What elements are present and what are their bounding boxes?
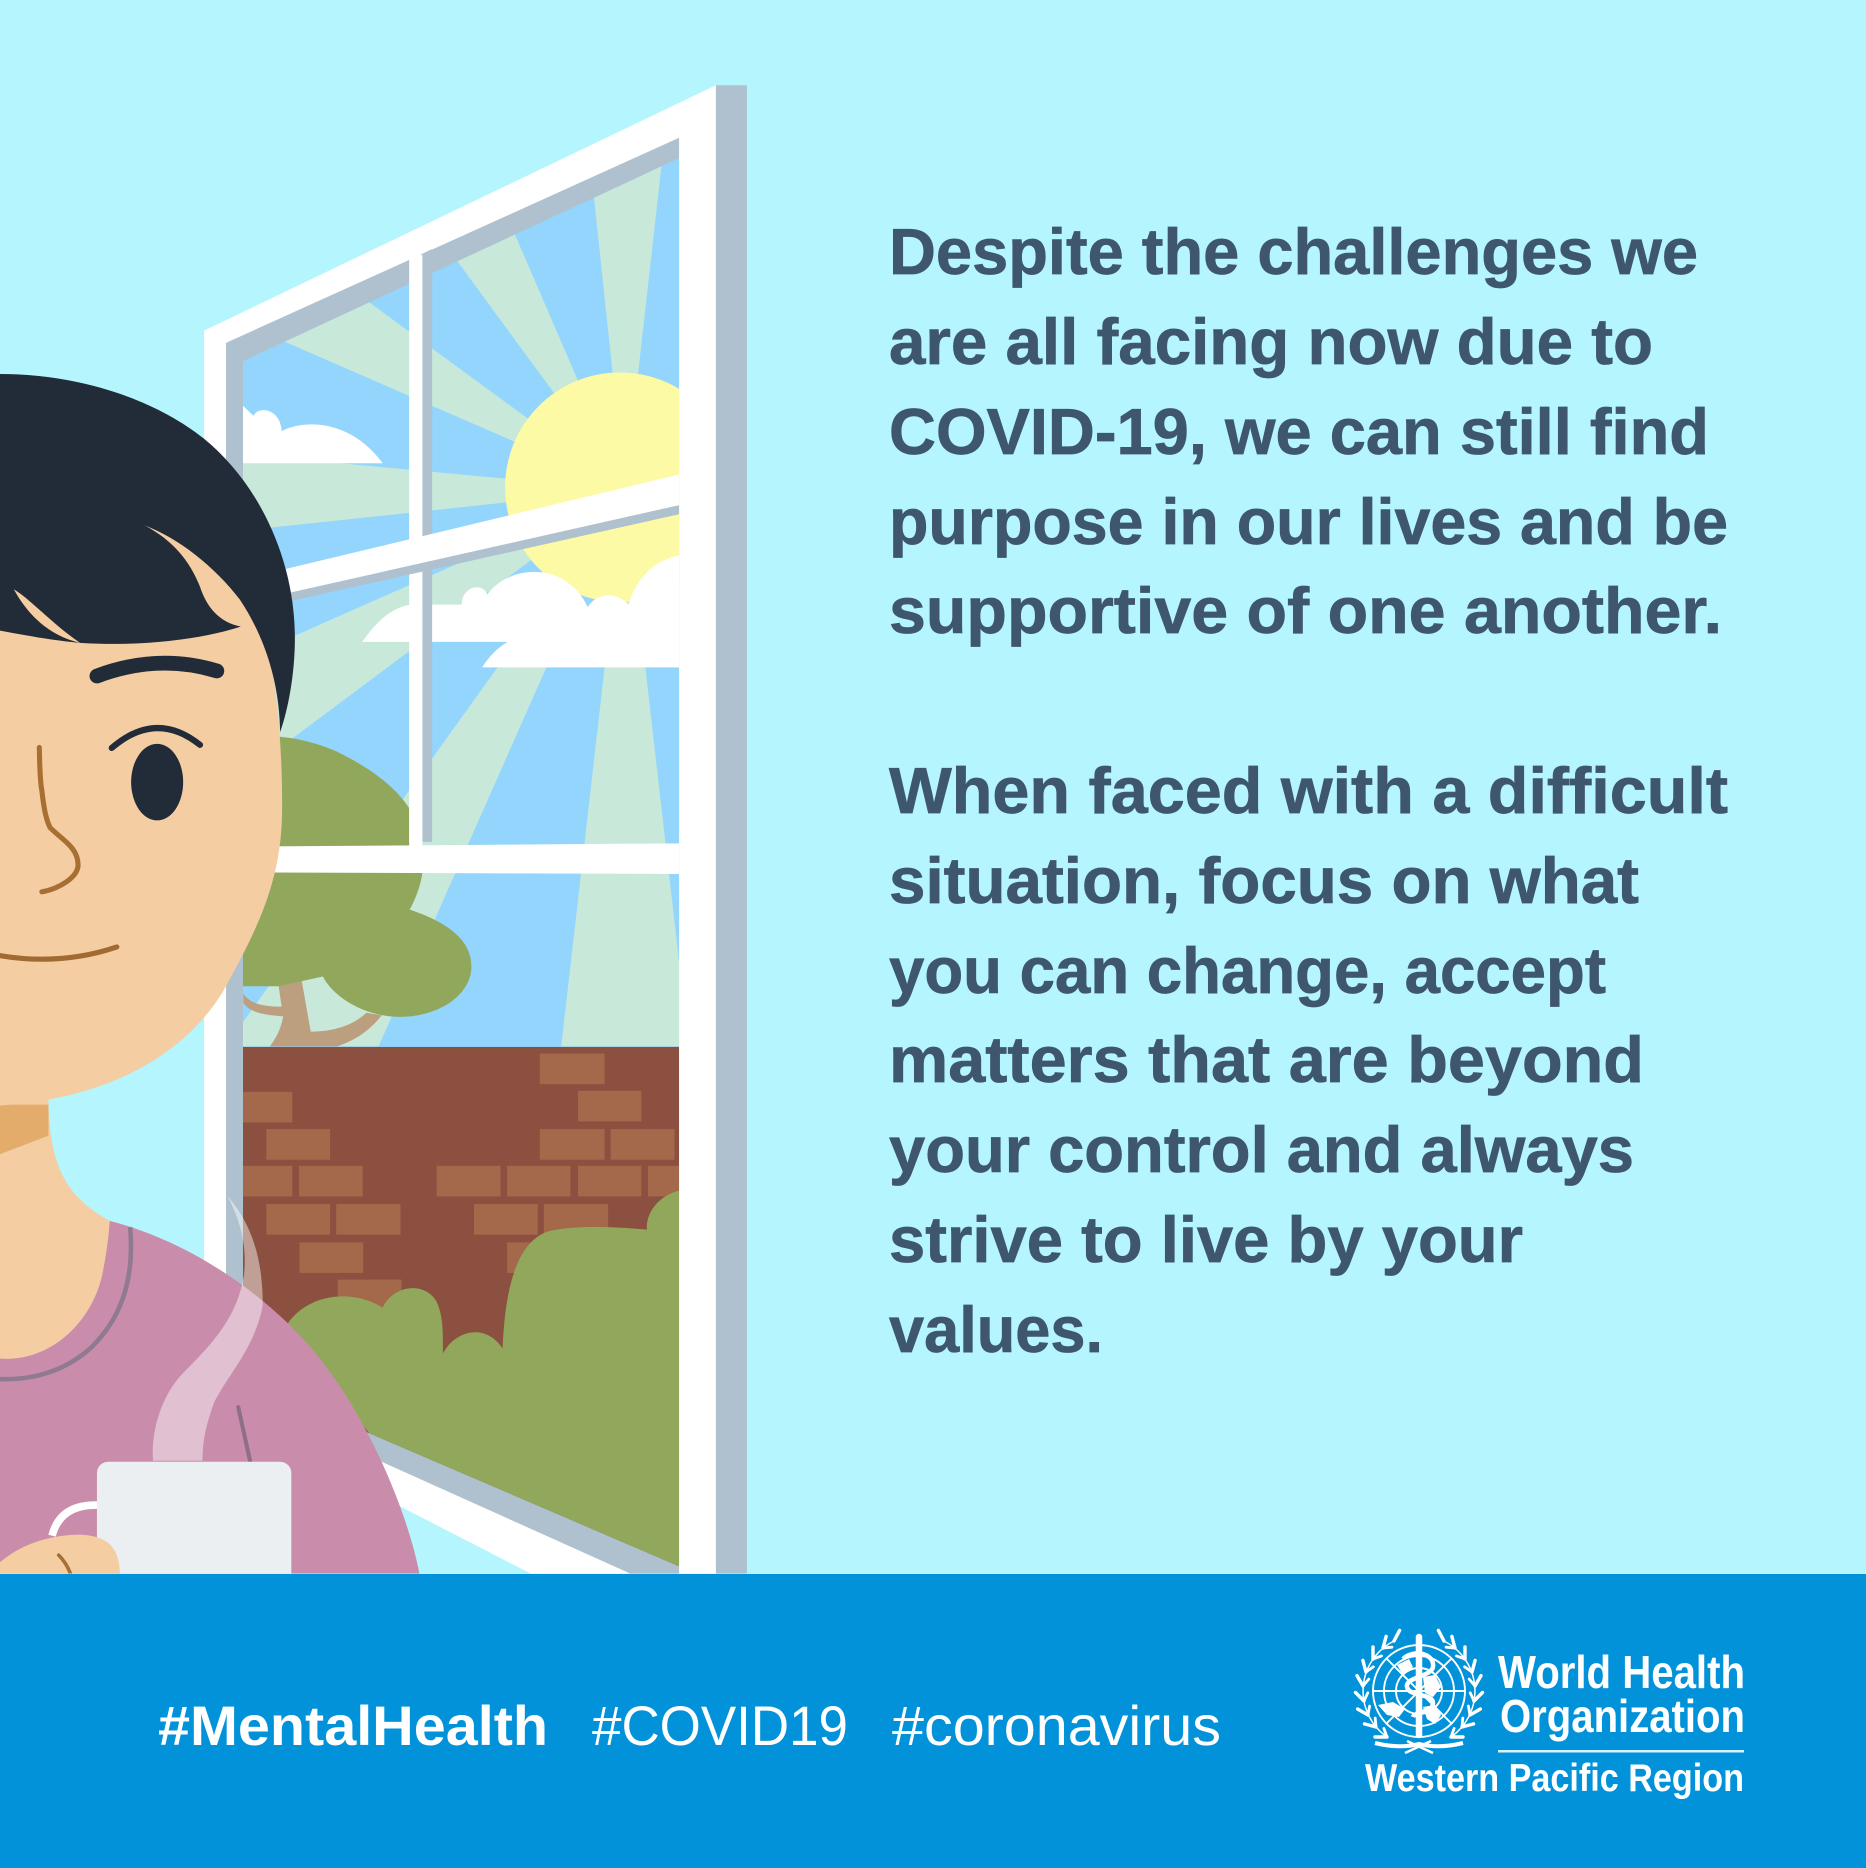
paragraph 1: COVID-19, we can still find [889, 395, 1709, 468]
brick wall [243, 1047, 682, 1578]
paragraph 2: When faced with a difficult [889, 754, 1728, 827]
paragraph 1: Despite the challenges we [889, 215, 1698, 288]
paragraph 2: you can change, accept [889, 934, 1606, 1007]
paragraph 1: supportive of one another. [889, 574, 1722, 647]
window bars [270, 249, 679, 874]
neck shadow [0, 1105, 48, 1154]
rod and serpent [1403, 1637, 1433, 1735]
WHO logo [1356, 1630, 1745, 1800]
window frame [204, 85, 747, 1573]
WHO emblem [1356, 1630, 1482, 1753]
eye [131, 744, 183, 820]
view through window [243, 158, 680, 1566]
paragraph 2: situation, focus on what [889, 844, 1639, 917]
organization name: World Health [1498, 1646, 1745, 1698]
shirt [0, 1221, 419, 1573]
person [0, 374, 419, 1584]
paragraph 2 [889, 754, 1728, 1366]
illustration: person at open window [0, 85, 747, 1584]
paragraph 1: are all facing now due to [889, 305, 1653, 378]
organization name: Organization [1500, 1690, 1745, 1742]
hashtags: #COVID19 [592, 1694, 848, 1757]
nose [39, 747, 78, 892]
globe [1373, 1645, 1465, 1737]
tree [243, 737, 471, 1046]
footer banner [0, 1574, 1866, 1868]
paragraph 1: purpose in our lives and be [889, 485, 1728, 558]
bushes [286, 1190, 681, 1577]
mug handle [52, 1505, 98, 1536]
hashtags: #MentalHealth [158, 1694, 548, 1757]
paragraph 2: strive to live by your [889, 1203, 1523, 1276]
hair [0, 374, 295, 732]
collar line [0, 1227, 131, 1379]
left cloud [243, 406, 383, 463]
laurel wreath [1356, 1630, 1482, 1753]
neck [0, 1097, 110, 1378]
eyelash [112, 728, 200, 748]
mug [97, 1462, 291, 1584]
sun [505, 372, 679, 602]
hand [0, 1535, 120, 1577]
paragraph 2: values. [889, 1293, 1103, 1366]
mouth [0, 947, 117, 959]
paragraph 2: matters that are beyond [889, 1023, 1644, 1096]
hair parting [14, 589, 80, 643]
message text [889, 215, 1728, 1366]
organization name: Western Pacific Region [1365, 1757, 1744, 1800]
hashtags: #coronavirus [892, 1694, 1221, 1757]
face [0, 510, 282, 1106]
finger line [59, 1555, 70, 1573]
sun rays [243, 166, 679, 1046]
paragraph 2: your control and always [889, 1113, 1634, 1186]
eyebrow [97, 663, 217, 676]
organization name [1365, 1646, 1745, 1800]
continents [1378, 1659, 1441, 1724]
hashtags [158, 1694, 1221, 1757]
paragraph 1 [889, 215, 1728, 647]
right cloud [362, 555, 681, 667]
sleeve line [238, 1407, 250, 1461]
steam [153, 1195, 263, 1461]
